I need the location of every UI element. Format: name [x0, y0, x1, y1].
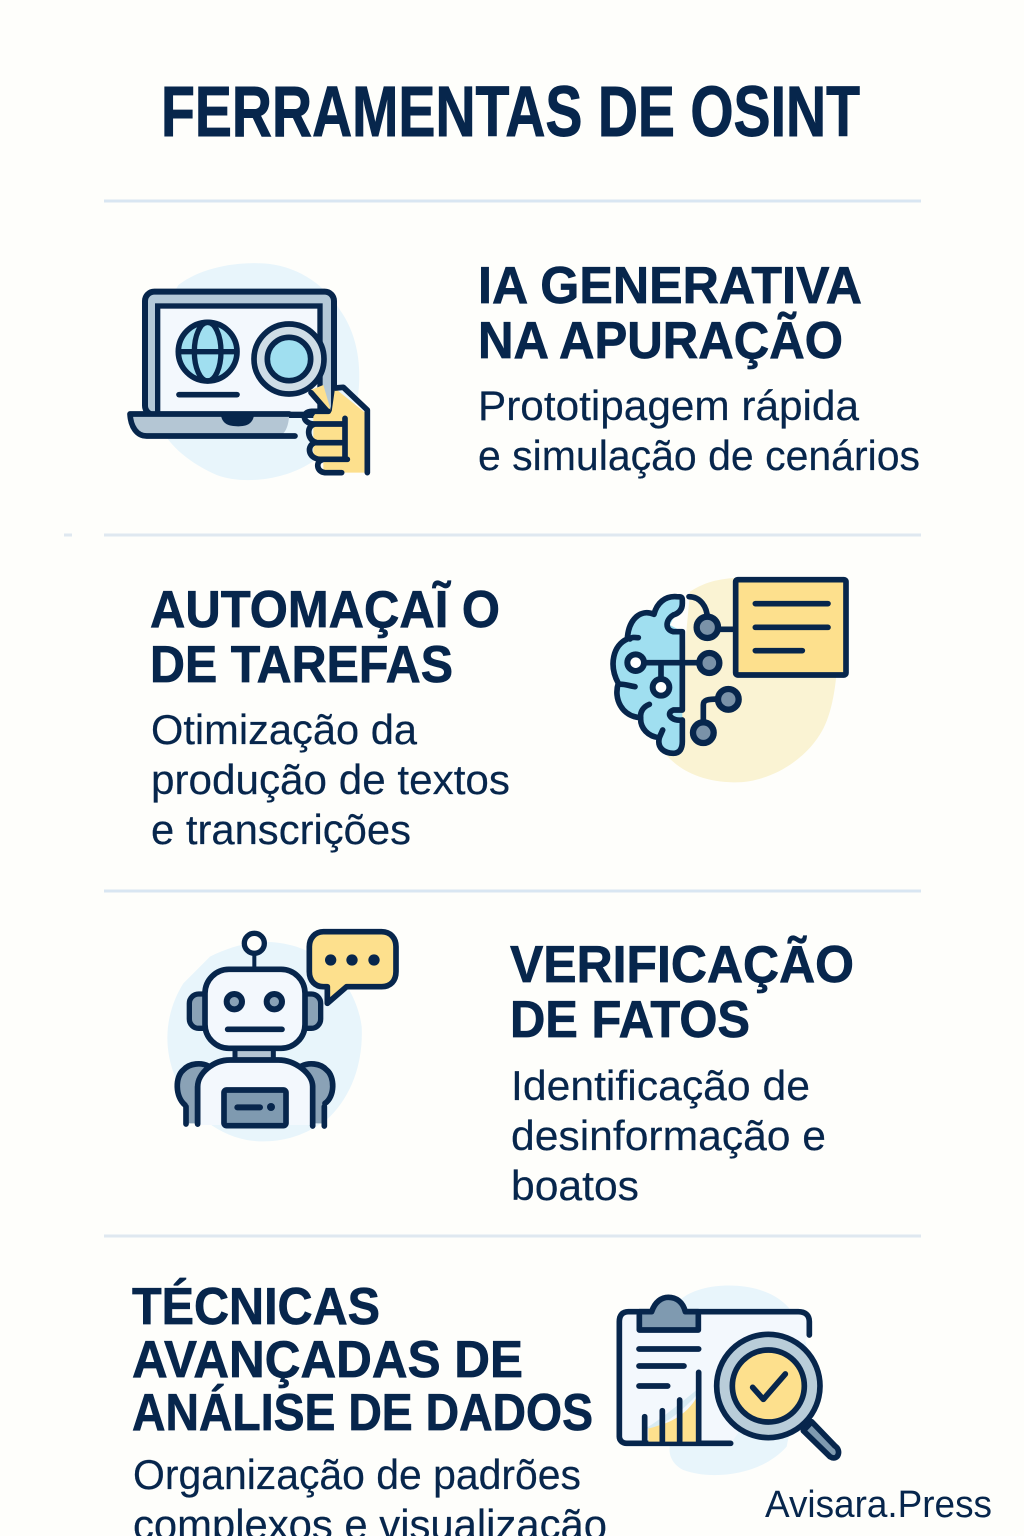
text: description: e transcrições	[151, 806, 411, 853]
heading: verificação: DE FATOS	[510, 991, 750, 1049]
heading: automação: DE TAREFAS	[150, 636, 453, 694]
heading: IA generativa: NA APURAÇÃO	[478, 311, 843, 370]
text: description: Prototipagem rápida	[478, 382, 860, 429]
heading: verificação: VERIFICAÇÃO	[510, 935, 854, 994]
panel: técnicas avançadas	[132, 1278, 839, 1536]
icon: robot with speech bubble	[167, 932, 396, 1141]
text: description: Organização de padrões	[133, 1451, 581, 1498]
icon: laptop with magnifier and hand	[130, 263, 367, 480]
panel: verificação de fatos	[167, 932, 854, 1209]
heading: técnicas: TÉCNICAS	[132, 1278, 380, 1336]
text: description: Otimização da	[151, 706, 418, 753]
heading: IA generativa: IA GENERATIVA	[478, 257, 862, 315]
panel: IA generativa	[130, 257, 920, 480]
text: description: e simulação de cenários	[478, 432, 920, 479]
heading: técnicas: ANÁLISE DE DADOS	[132, 1384, 593, 1442]
heading: técnicas: AVANÇADAS DE	[132, 1331, 523, 1389]
text: description: Identificação de	[511, 1062, 810, 1109]
text: description: produção de textos	[151, 756, 510, 803]
text: description: desinformação e	[511, 1112, 826, 1159]
brand credit: Avisara.Press	[765, 1484, 992, 1526]
text: description: boatos	[511, 1162, 639, 1209]
panel: automação de tarefas	[150, 578, 846, 853]
heading: automação: AUTOMAÇAĨ O	[150, 580, 500, 639]
icon: brain and note	[613, 578, 846, 782]
icon: clipboard and magnifier	[619, 1286, 839, 1475]
